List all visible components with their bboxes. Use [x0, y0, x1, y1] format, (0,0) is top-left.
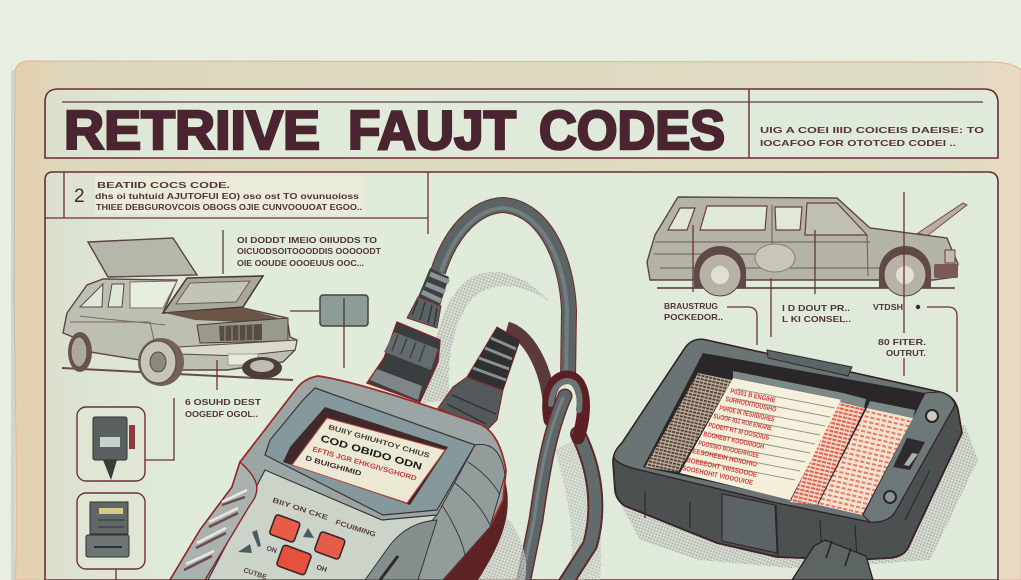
icon box: reader: [77, 493, 145, 580]
bottom callout: OOGEDF OGOL..: [185, 409, 258, 419]
cable one: [438, 205, 569, 380]
reader screen: [292, 418, 445, 503]
reader screen: EFTIS JGR EHKGIVSGHORD: [311, 446, 417, 483]
wagon labels: [664, 301, 957, 392]
wagon callout lines: [693, 192, 904, 337]
car callout text: [223, 230, 382, 274]
wagon labels: VTDSH: [873, 302, 903, 312]
connector two: [438, 327, 520, 430]
tablet code table: BOEEEOHT VIIISSOOOE: [686, 457, 758, 479]
station wagon illustration: [647, 197, 967, 296]
header note text: IOCAFOO FOR OTOTCED CODEI ..: [760, 138, 956, 148]
step text: dhs oi tuhtuid AJUTOFUI EO) oso ost TO ovunuoioss: [95, 191, 359, 201]
title text: FAUJT: [348, 99, 516, 161]
tablet code table: EESOHEEIH HOIIOHIO: [692, 448, 758, 469]
car callout text: OIE OOUDE OOOEUUS OOC...: [237, 258, 364, 268]
car illustration: open hood: [62, 238, 297, 386]
reader shadow: [465, 510, 526, 580]
tablet code table: PDOEIT RT III OOSOIUS: [708, 422, 770, 442]
step text: THIEE DEBGUROVCOIS OBOGS OJIE CUNVOOUOAT EGOO..: [96, 202, 362, 212]
car callout text: OICUODSOITOOODDIS OOOOODT: [237, 246, 382, 256]
reader button labels: BIIY ON CKE: [271, 497, 329, 522]
reader screen: BUIIY GHIUHTOY CHIUS: [327, 424, 431, 460]
tablet code table: [680, 371, 843, 500]
handheld code reader: [170, 376, 508, 580]
wagon labels: I D DOUT PR..: [782, 303, 850, 313]
wagon labels: OUTRUT.: [886, 348, 926, 358]
paper left shadow: [11, 70, 15, 580]
tablet code table: BOOHEBT KOOOIIIOOH: [703, 431, 765, 451]
cable two: [507, 328, 549, 400]
title text: RETRIIVE: [64, 99, 320, 161]
reader button labels: FCUIMING: [334, 519, 377, 539]
small module icon: [290, 295, 368, 368]
cable shadow: [423, 272, 550, 403]
step text: BEATIID COCS CODE.: [97, 180, 230, 190]
tablet ledger column: [645, 373, 732, 472]
reader body lower face: [208, 470, 437, 580]
connector one: [367, 268, 449, 402]
icon box: meter: [77, 407, 145, 481]
title text: CODES: [539, 99, 725, 161]
wagon labels: 80 FITER.: [878, 337, 926, 347]
tablet code table: P0HOE IK IIESHDIOHES: [719, 405, 775, 424]
bottom callout: 6 OSUHD DEST: [185, 397, 262, 407]
wagon labels: L KI CONSEL..: [782, 314, 851, 324]
step number: 2: [74, 186, 85, 207]
step text: [95, 180, 362, 212]
wagon labels: POCKEDOR..: [664, 312, 723, 322]
reader screen bezel: [265, 388, 475, 515]
tablet red columns: [790, 393, 915, 515]
tablet code table: PDOSSIO BOOOEHHOEE: [698, 440, 760, 460]
tablet plug: [792, 540, 873, 580]
reader screen: D BUIGHIMID: [304, 455, 362, 478]
reader left grip: [170, 462, 257, 580]
tablet code table: SOOEHOHIT VIOOOUIOE: [682, 465, 754, 487]
tablet code table: SUHHOOITIOUSIHO: [725, 396, 777, 414]
reader screen: COD OBIDO ODN: [319, 433, 423, 473]
reader button labels: OH: [315, 564, 328, 574]
tablet code table: P0301 B ENGIHE: [730, 388, 776, 405]
step intro box: [45, 172, 428, 234]
header note text: UIG A COEI IIID COICEIS DAEISE: TO: [760, 125, 985, 135]
bottom callout: [145, 360, 262, 460]
reader button labels: [242, 497, 377, 580]
reader buttons: [238, 514, 346, 575]
scanner tablet: [613, 339, 962, 580]
tablet buttons: [884, 410, 938, 503]
reader button labels: ON: [265, 545, 278, 555]
tablet shadow: [620, 425, 978, 568]
cable loop: [521, 377, 595, 580]
title text: [64, 99, 725, 161]
wagon labels: BRAUSTRUG: [664, 301, 718, 311]
reader right grip: [365, 444, 505, 580]
main panel: [45, 172, 998, 580]
header note text: [760, 125, 985, 148]
tablet code table: SUOOF 811 RO8 ENGINE: [713, 413, 773, 432]
car callout text: OI DODDT IMEIO OIIUDDS TO: [237, 235, 377, 245]
title panel: [45, 89, 998, 161]
knot shadow: [555, 440, 601, 580]
